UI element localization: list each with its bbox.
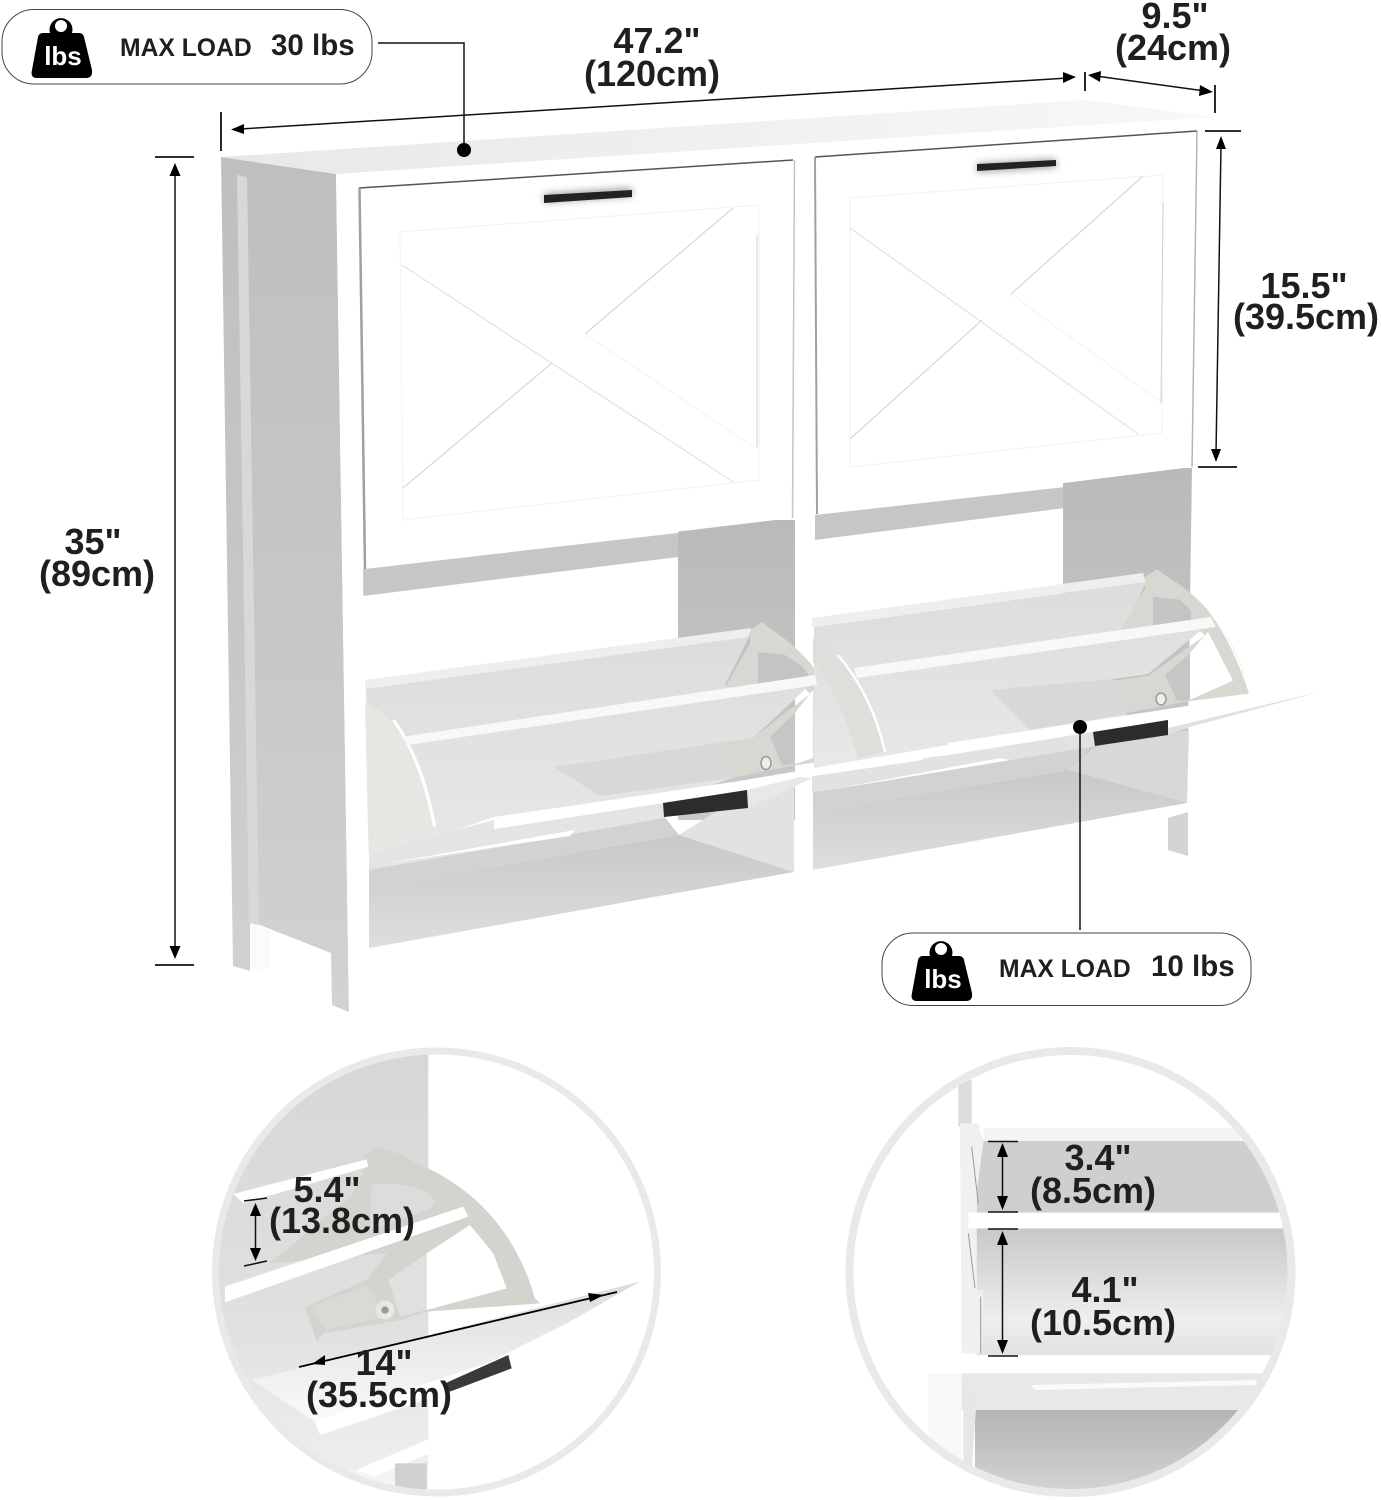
left drawer flap	[369, 750, 923, 870]
flap length dimension	[299, 1292, 617, 1367]
load badge: 10 lbs	[882, 933, 1251, 1006]
detail circle: compartment heights	[845, 1045, 1300, 1500]
dimension: door height: 15.5"	[1260, 265, 1348, 306]
right upper door	[815, 131, 1197, 514]
side hinge	[960, 1123, 983, 1353]
right hinge of left drawer	[718, 622, 855, 778]
left bay back panels	[363, 520, 795, 948]
dimension: door height: (39.5cm)	[1233, 296, 1379, 337]
right drawer bin	[812, 569, 1250, 768]
lower compartment dimension	[988, 1229, 1018, 1356]
dimension: height: 35"	[64, 521, 122, 562]
left hinge of right drawer	[813, 638, 885, 758]
dimension: depth: (24cm)	[1115, 27, 1231, 68]
right drawer shelf lip	[854, 617, 1216, 678]
panel mouldings	[400, 205, 759, 520]
drop height dimension	[244, 1198, 267, 1266]
left stile	[337, 176, 368, 1012]
left drawer bin	[365, 622, 855, 860]
dimension: depth	[1088, 0, 1231, 113]
detail circle: flap hinge: (13.8cm)	[269, 1200, 415, 1241]
dimension: height: (89cm)	[39, 553, 155, 594]
door handle	[544, 190, 632, 203]
icon: weight: lbs	[924, 964, 962, 994]
flap handle	[445, 1355, 512, 1392]
leader line to cabinet top	[378, 43, 471, 157]
icon: weight: lbs	[44, 41, 82, 71]
cabinet top surface	[221, 100, 1215, 174]
flap handle	[663, 790, 748, 817]
detail circle: compartment heights: (10.5cm)	[1030, 1302, 1176, 1343]
leader line to drawer	[1073, 720, 1087, 930]
upper lip	[365, 628, 751, 689]
dimension: width: (120cm)	[584, 53, 720, 94]
shoe cabinet	[221, 100, 1323, 1012]
centre divider	[795, 155, 813, 873]
dimension: width: 47.2"	[613, 20, 701, 61]
panel mouldings	[850, 175, 1163, 467]
detail circle: compartment heights: 4.1"	[1071, 1269, 1139, 1310]
door handle	[977, 160, 1056, 171]
flap plate	[252, 1282, 640, 1422]
load badge: 10 lbs: MAX LOAD	[999, 956, 1131, 983]
detail circle: flap hinge: (35.5cm)	[306, 1374, 452, 1415]
dimension: door height	[1198, 131, 1379, 467]
right hinge of right drawer	[1113, 569, 1250, 713]
icon: weight	[912, 941, 972, 1001]
left drawer shelf lip	[401, 675, 817, 745]
front face frame	[336, 117, 1215, 1012]
detail circle: compartment heights: (8.5cm)	[1030, 1170, 1156, 1211]
detail circle: flap hinge: 14"	[355, 1342, 413, 1383]
right leg	[1168, 812, 1188, 856]
detail circle: flap hinge	[200, 1040, 665, 1500]
load badge: 10 lbs: 10 lbs	[1151, 950, 1235, 983]
dimension: height	[39, 157, 194, 965]
upper lip	[812, 573, 1146, 627]
load badge: 30 lbs	[2, 10, 372, 84]
hinge arm	[268, 1147, 540, 1342]
icon: weight	[32, 18, 92, 78]
load badge: 30 lbs: 30 lbs	[271, 29, 355, 62]
detail circle: compartment heights: 3.4"	[1064, 1137, 1132, 1178]
dimension: width	[221, 20, 1085, 151]
right drawer flap	[812, 685, 1323, 792]
right bay back panels	[812, 468, 1192, 870]
left upper door	[359, 160, 794, 569]
load badge: 30 lbs: MAX LOAD	[120, 35, 252, 62]
flap handle	[1093, 720, 1168, 746]
detail circle: flap hinge: 5.4"	[293, 1169, 361, 1210]
cabinet side panel with legs	[221, 157, 349, 1012]
shelf strips	[233, 1159, 368, 1203]
upper compartment dimension	[988, 1142, 1018, 1212]
left hinge of left drawer	[365, 703, 435, 852]
